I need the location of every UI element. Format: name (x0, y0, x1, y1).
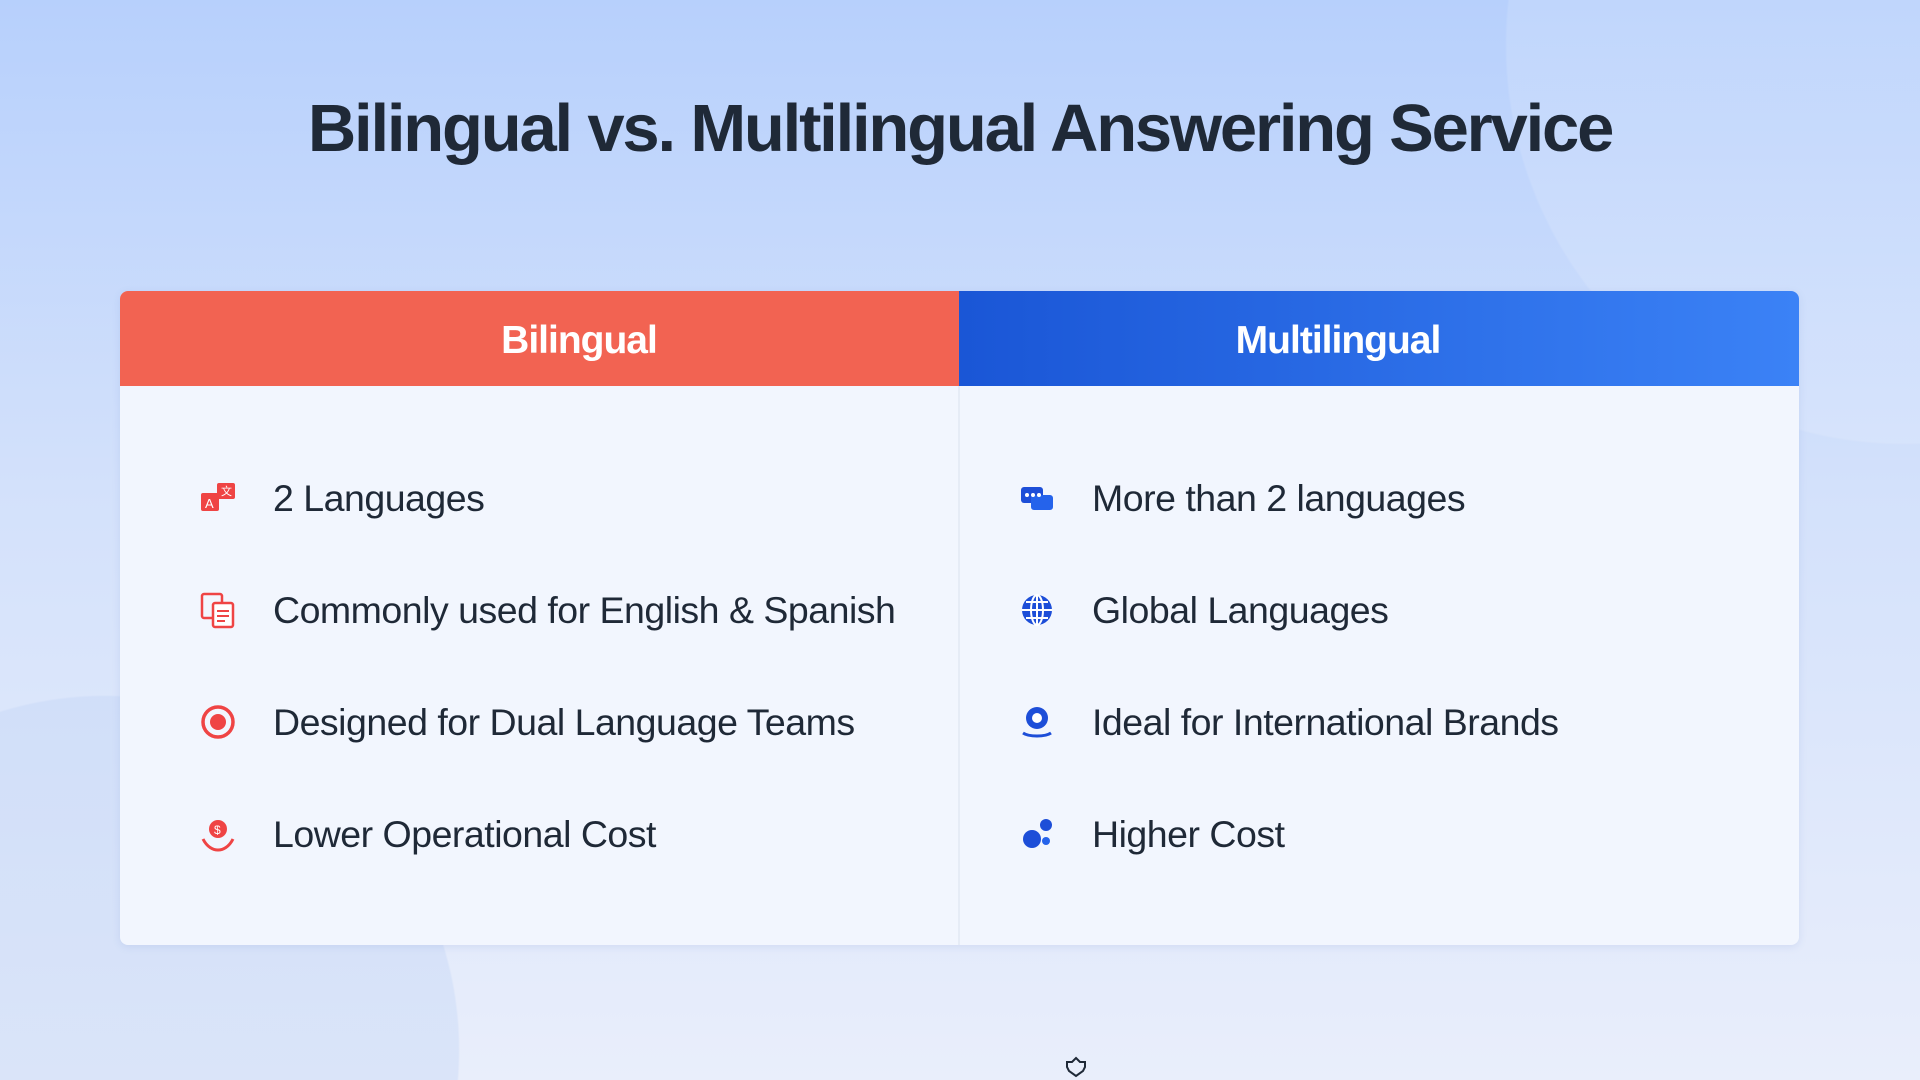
row: More than 2 languages: More than 2 languages (1092, 476, 1465, 518)
row: 2 Languages: 文 (221, 483, 232, 499)
header: Multilingual (959, 291, 1799, 386)
header: Multilingual: Multilingual (1236, 319, 1440, 362)
row: Global Languages: Global Languages (1092, 588, 1388, 630)
row: International Brands: Ideal for International Brands (1092, 700, 1559, 742)
header: Bilingual (120, 291, 959, 386)
row: Higher Cost: Higher Cost (1092, 812, 1284, 854)
row: Lower Operational Cost: Lower Operational Cost (273, 812, 656, 854)
row: Dual Language Teams: Designed for Dual Language Teams (273, 700, 855, 742)
title: Bilingual vs. Multilingual Answering Service (308, 91, 1612, 166)
icon: bottom badge (1066, 1056, 1086, 1078)
row: 2 Languages: A (205, 496, 214, 511)
row: 2 Languages: 2 Languages (273, 476, 484, 518)
comparison table (120, 291, 1799, 945)
row: English & Spanish: Commonly used for English & Spanish (273, 588, 895, 630)
row: Lower Operational Cost: $ (214, 823, 221, 837)
header: Bilingual: Bilingual (501, 319, 657, 362)
